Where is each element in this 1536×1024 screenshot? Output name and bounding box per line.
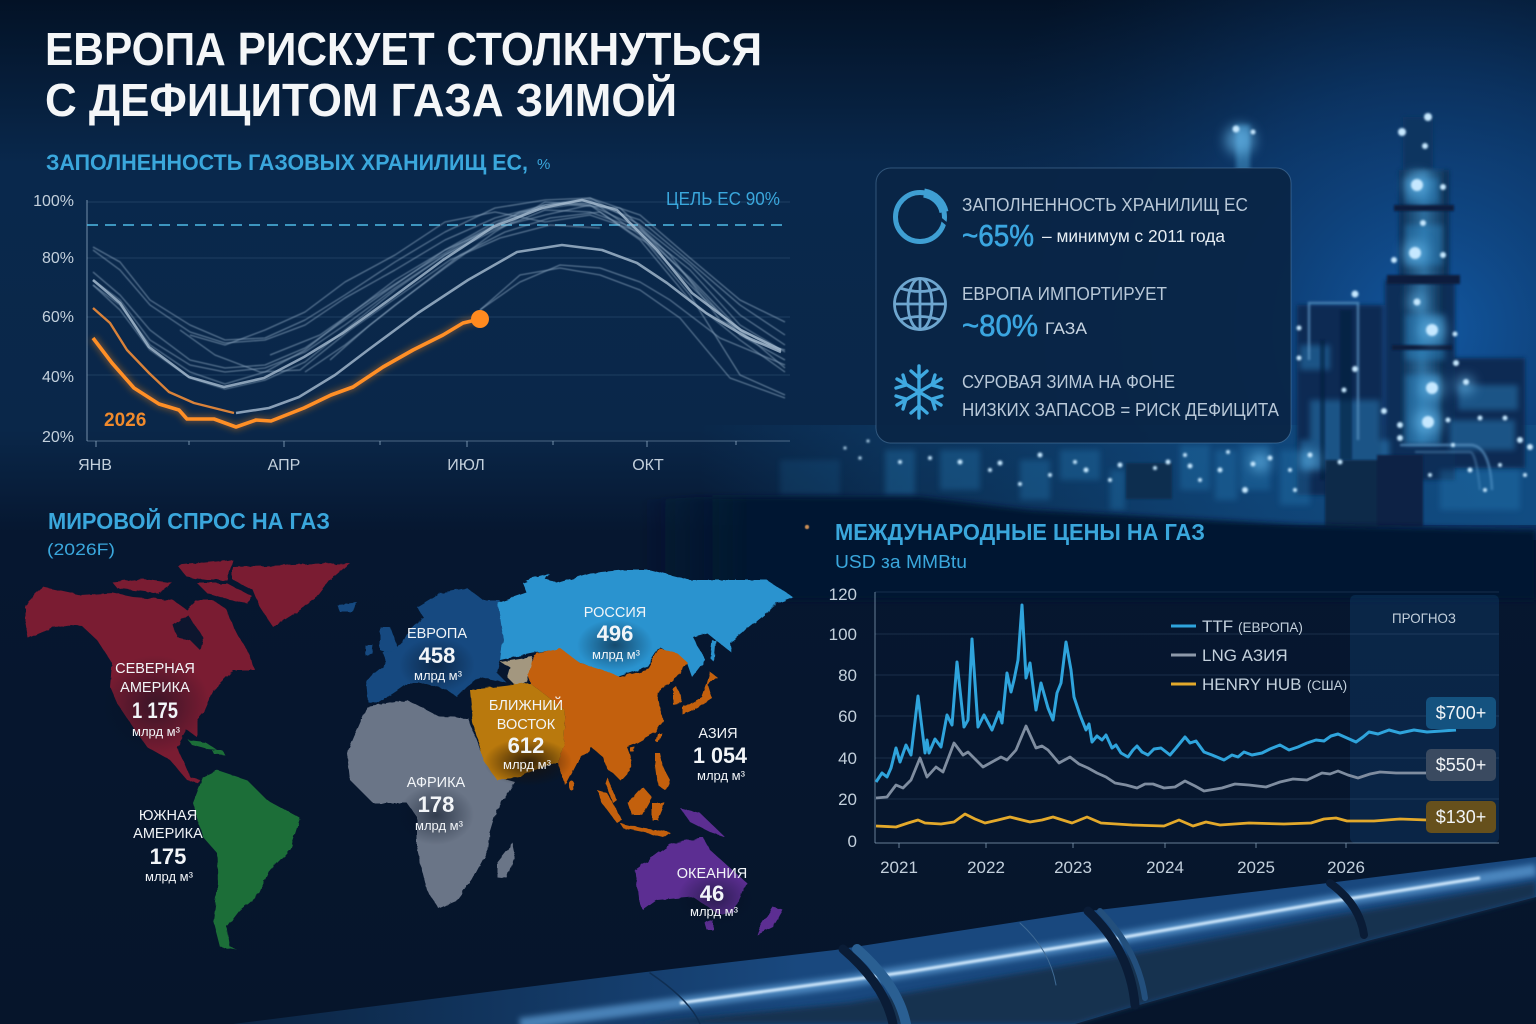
label: Europe: ЕВРОПА <box>407 626 467 642</box>
line: TTF <box>876 605 1456 782</box>
chart: EU gas storage <box>33 189 790 474</box>
title <box>45 23 762 126</box>
label: North America: млрд м³ <box>132 724 181 739</box>
line: Henry Hub <box>876 814 1427 827</box>
label: Russia <box>584 605 646 662</box>
axis labels: 2023 <box>1054 858 1092 877</box>
label: Asia <box>693 726 748 783</box>
fact 3 text <box>962 372 1279 420</box>
axis labels: 2021 <box>880 858 918 877</box>
axis labels: 40 <box>838 749 857 768</box>
line: LNG Asia <box>876 726 1436 798</box>
label: North America: 1 175 <box>132 698 178 723</box>
badge: Henry Hub forecast: $130+ <box>1436 807 1486 827</box>
region: Africa <box>347 700 515 908</box>
label shades <box>100 619 753 926</box>
icon: snowflake <box>896 366 942 418</box>
region: South America <box>188 740 300 950</box>
axis labels: 60 <box>838 707 857 726</box>
storage chart heading: % <box>537 156 550 173</box>
label: Oceania: млрд м³ <box>690 904 739 919</box>
map heading: МИРОВОЙ СПРОС НА ГАЗ <box>48 507 330 534</box>
axis labels: 0 <box>848 832 857 851</box>
label: North America: СЕВЕРНАЯ <box>115 661 195 677</box>
region: Oceania <box>635 808 783 935</box>
label: North America: АМЕРИКА <box>120 680 190 696</box>
historical lines <box>93 198 785 398</box>
fact 2 text: ~80% <box>962 308 1038 343</box>
fact 2 text: ГАЗА <box>1045 319 1088 338</box>
forecast band <box>1350 595 1499 843</box>
fact 3 text: НИЗКИХ ЗАПАСОВ = РИСК ДЕФИЦИТА <box>962 400 1279 420</box>
axis labels: 80% <box>42 250 74 267</box>
label: Russia: РОССИЯ <box>584 605 646 621</box>
fact 1 text: – минимум с 2011 года <box>1042 226 1225 246</box>
legend: (США) <box>1307 678 1347 693</box>
label: Russia: 496 <box>597 621 633 646</box>
title: С ДЕФИЦИТОМ ГАЗА ЗИМОЙ <box>45 74 677 126</box>
label: Russia: млрд м³ <box>592 647 641 662</box>
legend: (ЕВРОПА) <box>1238 620 1303 635</box>
label: Middle East: БЛИЖНИЙ <box>489 696 563 714</box>
target line: ЦЕЛЬ ЕС 90% <box>666 189 780 209</box>
label: Oceania: 46 <box>700 881 724 906</box>
axis labels <box>33 193 664 474</box>
region: Russia <box>498 570 793 677</box>
axis labels: 100 <box>829 625 857 644</box>
world map <box>25 560 793 950</box>
label: Middle East: млрд м³ <box>503 757 552 772</box>
region: Europe <box>337 588 507 703</box>
2025 orange line <box>93 308 234 413</box>
price chart heading: USD за MMBtu <box>835 552 967 572</box>
legend: LNG АЗИЯ <box>1202 646 1288 665</box>
badge: LNG forecast <box>1426 749 1496 781</box>
fact 1 text: ~65% <box>962 218 1034 253</box>
axis labels: ИЮЛ <box>447 457 485 474</box>
label: Europe: 458 <box>419 643 455 668</box>
label: Africa <box>407 775 466 833</box>
badge: Henry Hub forecast <box>1426 801 1496 833</box>
axis labels: АПР <box>268 457 300 474</box>
axis labels: ЯНВ <box>78 457 112 474</box>
label: South America: млрд м³ <box>145 869 194 884</box>
axis labels: 80 <box>838 666 857 685</box>
price chart heading: МЕЖДУНАРОДНЫЕ ЦЕНЫ НА ГАЗ <box>835 519 1205 545</box>
label: Asia: 1 054 <box>693 743 748 768</box>
axis labels: 100% <box>33 193 74 210</box>
thick grey lines <box>93 200 781 413</box>
panel: key facts <box>876 168 1291 443</box>
fact 1 text: ЗАПОЛНЕННОСТЬ ХРАНИЛИЩ ЕС <box>962 195 1248 215</box>
2026 orange line: 2026 <box>104 410 146 431</box>
icon: globe <box>894 278 946 330</box>
legend <box>1171 617 1347 694</box>
axis labels: 2025 <box>1237 858 1275 877</box>
label: Europe <box>407 626 467 683</box>
dark horizon <box>640 497 1536 600</box>
label: Middle East: ВОСТОК <box>497 717 556 733</box>
label: Middle East: 612 <box>508 733 544 758</box>
axis labels: 2022 <box>967 858 1005 877</box>
axis labels: 120 <box>829 585 857 604</box>
forecast band: ПРОГНОЗ <box>1392 610 1456 626</box>
chart: gas prices <box>829 585 1499 877</box>
fact 2 text: ЕВРОПА ИМПОРТИРУЕТ <box>962 284 1167 304</box>
region: Middle East <box>470 683 565 780</box>
badge: TTF forecast: $700+ <box>1436 703 1486 723</box>
label: Africa: млрд м³ <box>415 818 464 833</box>
legend: TTF <box>1202 617 1233 636</box>
pipeline <box>233 857 1536 1024</box>
region: Kazakhstan area <box>500 657 533 687</box>
title: ЕВРОПА РИСКУЕТ СТОЛКНУТЬСЯ <box>45 23 762 75</box>
fact 3 text: СУРОВАЯ ЗИМА НА ФОНЕ <box>962 372 1175 392</box>
fact 2 text <box>962 284 1167 343</box>
region: North America <box>25 560 350 783</box>
storage chart heading: ЗАПОЛНЕННОСТЬ ГАЗОВЫХ ХРАНИЛИЩ ЕС, <box>46 150 528 175</box>
label: Africa: 178 <box>418 792 454 817</box>
label: North America <box>115 661 195 739</box>
badge: LNG forecast: $550+ <box>1436 755 1486 775</box>
axis labels: 2024 <box>1146 858 1184 877</box>
label: South America <box>133 808 203 884</box>
badge: TTF forecast <box>1426 697 1496 729</box>
label: Middle East <box>489 696 563 772</box>
axis labels: 20 <box>838 790 857 809</box>
refinery backdrop <box>700 113 1536 528</box>
label: South America: 175 <box>150 844 186 869</box>
label: Oceania: ОКЕАНИЯ <box>677 866 747 882</box>
label: Europe: млрд м³ <box>414 668 463 683</box>
price chart heading <box>835 519 1205 572</box>
map heading <box>47 507 330 559</box>
region: Asia <box>527 648 717 837</box>
icon: storage ring <box>896 192 948 242</box>
fact 1 text <box>962 195 1248 253</box>
label: Oceania <box>677 866 747 919</box>
map heading: (2026F) <box>47 540 115 559</box>
axis labels: 20% <box>42 429 74 446</box>
axis labels: ОКТ <box>632 457 664 474</box>
label: Asia: АЗИЯ <box>698 726 738 742</box>
label: Asia: млрд м³ <box>697 768 746 783</box>
axis labels: 40% <box>42 369 74 386</box>
axis labels: 60% <box>42 309 74 326</box>
label: South America: ЮЖНАЯ <box>139 808 197 824</box>
2026 orange line <box>93 310 489 431</box>
legend: HENRY HUB <box>1202 675 1302 694</box>
distant light <box>805 525 809 529</box>
axis labels: 2026 <box>1327 858 1365 877</box>
axis labels <box>829 585 1365 877</box>
label: Africa: АФРИКА <box>407 775 466 791</box>
label: South America: АМЕРИКА <box>133 826 203 842</box>
